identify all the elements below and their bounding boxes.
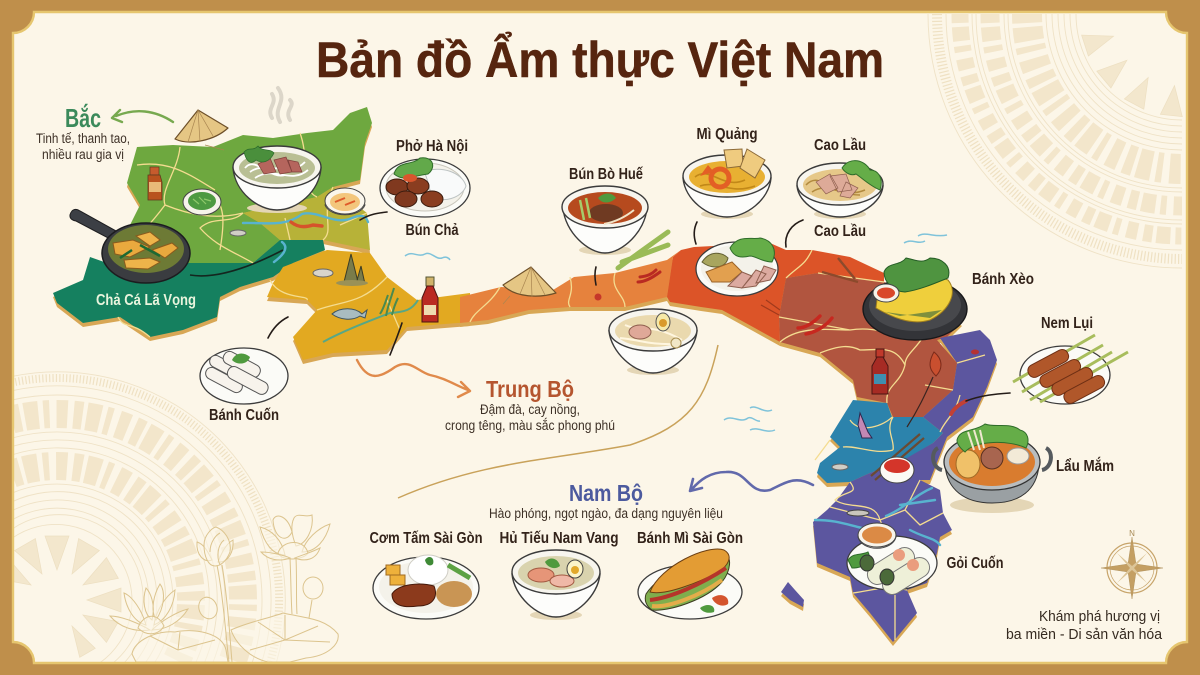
leader: Nem Lụi [966,393,1010,401]
dish: sauce bottle north [148,167,162,200]
footer note [1006,608,1163,643]
region: North mountains [107,107,372,263]
dish: lower noodle bowl [609,309,697,375]
label: Cao Lầu bottom: Cao Lầu [814,223,866,240]
icon: chili map south central [798,316,832,334]
label: Trung Bộ [445,376,615,433]
lotus: middle bud [197,527,233,566]
dish: Cao Lầu bowl [797,161,883,219]
icon: stone 2 [313,269,333,277]
lotus: top right flower [260,515,330,560]
leader: fish sauce [390,323,402,355]
region label: Bắc: Tinh tế, thanh tao, [36,131,130,146]
lotus: bottom flower [110,584,188,634]
decor: waves south [724,407,775,431]
icon: red chili mark [951,401,966,414]
icon: dried chili long [930,352,941,376]
dish: lẩu mắm pot [933,424,1051,513]
region: island [781,582,804,607]
leader: Bún Chả [360,212,387,220]
lotus line art [110,515,338,662]
icon: fish [332,309,367,319]
map of Vietnam [53,107,997,642]
leader: gold curve [398,345,718,498]
label: Chả Cá Lã Vọng: Chả Cá Lã Vọng [96,292,196,309]
leader: chili [907,377,933,427]
footer note: Khám phá hương vị [1039,608,1160,625]
dish: hủ tiếu bowl [512,550,600,620]
icon: chili oval [971,350,979,354]
label: Trung Bộ: crong têng, màu sắc phong phú [445,418,615,433]
dish: chili sauce with chopsticks [871,434,924,483]
icon: steam [270,88,292,122]
icon: conical hat north [175,110,228,150]
region: South central purple [870,330,997,480]
label: Bún Bò Huế: Bún Bò Huế [569,166,643,183]
dish: nem lụi [1013,335,1128,406]
dish: fish sauce bottle central [422,277,438,322]
label: Hủ Tiếu Nam Vang: Hủ Tiếu Nam Vang [500,530,618,547]
region: North coast [53,240,325,337]
dish: bánh mì [638,549,742,619]
label: Nem Lụi: Nem Lụi [1041,315,1093,332]
label: Bún Chả: Bún Chả [406,222,459,239]
region: Thanh-Nghe yellow [267,250,470,360]
region: Mekong purple [813,462,952,642]
rivers [243,213,940,545]
dish: cơm tấm [373,555,479,619]
dish: herb bowl [183,189,221,215]
icon: shallots blue region [858,413,872,438]
label: Nam Bộ: Hào phóng, ngọt ngào, đa dạng nguyên liệu [489,506,723,521]
region: Da Nang red-orange [667,243,884,342]
icon: stone south [832,464,848,470]
title: Bản đồ Ẩm thực Việt Nam [316,32,884,88]
drum pattern: bottom left [0,372,285,663]
region: Central orange [460,250,681,323]
dish: Mì Quảng bowl [683,149,771,219]
label: Phở Hà Nội: Phở Hà Nội [396,138,468,155]
dish: phở bowl [233,146,321,213]
region: South central terracotta [779,273,962,417]
region: Red River delta [243,187,370,250]
icon: small sticks [761,300,780,315]
dish: Bún Bò Huế bowl [562,186,648,255]
label: Trung Bộ: Đậm đà, cay nồng, [480,402,580,417]
decor: waves north [405,253,450,260]
province borders [118,133,985,640]
region label: Bắc: Bắc [65,103,101,133]
label: Bánh Xèo: Bánh Xèo [972,271,1034,288]
dish: bánh xèo [863,258,967,340]
dish: gỏi cuốn [847,523,937,598]
leader: Bún Bò Huế [595,267,596,285]
dish: bánh cuốn [200,348,288,404]
dish: chả cá pan [70,210,190,283]
lotus: leaves and stems [132,558,338,662]
lotus: seed pods [196,577,323,621]
leader: bánh cuốn [268,317,288,338]
region label: Bắc: nhiều rau gia vị [42,147,124,162]
label: Nam Bộ [489,480,723,521]
label: Bánh Cuốn: Bánh Cuốn [209,407,279,424]
arrow: Trung Bộ [357,360,470,397]
arrow: Bắc [112,110,173,122]
footer note: ba miền - Di sản văn hóa [1006,626,1163,643]
icon: bamboo shoots [336,254,368,286]
compass [1101,529,1163,599]
icon: lemongrass [618,232,668,268]
compass: N [1129,529,1135,538]
label: Cơm Tấm Sài Gòn: Cơm Tấm Sài Gòn [370,530,482,547]
label: Gỏi Cuốn: Gỏi Cuốn [946,555,1004,572]
arrow: Nam Bộ [690,472,813,491]
icon: chili [291,222,322,227]
leader: Mì Quảng [694,222,697,244]
label: Mì Quảng: Mì Quảng [696,126,758,143]
decor: waves central [904,234,947,243]
label: Trung Bộ: Trung Bộ [486,376,574,402]
icon: stone [230,230,246,236]
region label: Bắc [36,103,130,162]
label: Cao Lầu top: Cao Lầu [814,137,866,154]
icon: red pepper dot [594,294,602,300]
icon: stone mekong [847,510,869,516]
leader: Cao Lầu [786,220,803,247]
icon: chilies central [638,270,660,282]
label: Lẩu Mắm: Lẩu Mắm [1056,456,1114,475]
icon: conical hat central [503,267,556,304]
icon: chopsticks on map [822,258,858,282]
dish: fish sauce bottle south [872,349,888,394]
icon: reed [380,288,398,316]
label: Nam Bộ: Nam Bộ [569,480,643,506]
drum pattern: top right [928,14,1185,268]
dish: bún chả plate [380,158,470,217]
dish: Cao Lầu plate on map [696,238,778,296]
leader: Chả Cá [190,250,283,276]
label: Bánh Mì Sài Gòn: Bánh Mì Sài Gòn [637,530,743,547]
dish: dipping sauce [325,188,365,215]
region: Highlands blue [817,400,943,483]
